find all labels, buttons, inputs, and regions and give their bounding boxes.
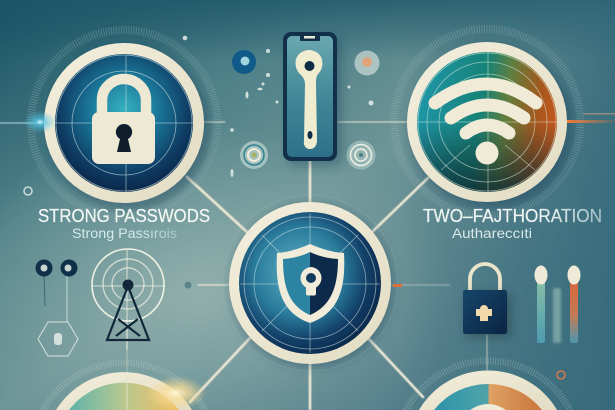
panel: wifi badge [394,29,580,215]
icon: concentric token left [240,141,268,169]
panel: bottom right badge [406,361,570,410]
icon: blue dot button [232,50,256,74]
heading: strong passwords: STRONG PASSWODS [38,206,210,226]
panel: shield badge [222,195,398,371]
icon: password strength bars [534,266,580,379]
heading: two-factor authentication [423,206,602,241]
sparkle particles [24,36,374,195]
icon: concentric token right [346,140,376,170]
phone with key [283,32,342,166]
connector lines [0,122,487,409]
panel: strong passwords lock badge [31,30,217,216]
icon: pins and hexagon [36,260,78,356]
icon: key [296,50,322,149]
icon: signal tower [92,249,192,350]
subheading: authentication: Authareccıti [452,225,532,241]
heading: strong passwords [38,206,210,241]
icon: small padlock [463,264,511,337]
icon: shield [277,244,344,323]
light flares [24,111,615,410]
panel: bottom left badge [43,363,205,410]
icon: wifi [435,84,536,164]
icon: padlock [92,79,155,164]
heading: two-factor authentication: TWO–FAJTHORATION [423,206,602,226]
subheading: strong passwords: Strong Passırois [72,225,177,241]
icon: peach token [354,50,380,76]
